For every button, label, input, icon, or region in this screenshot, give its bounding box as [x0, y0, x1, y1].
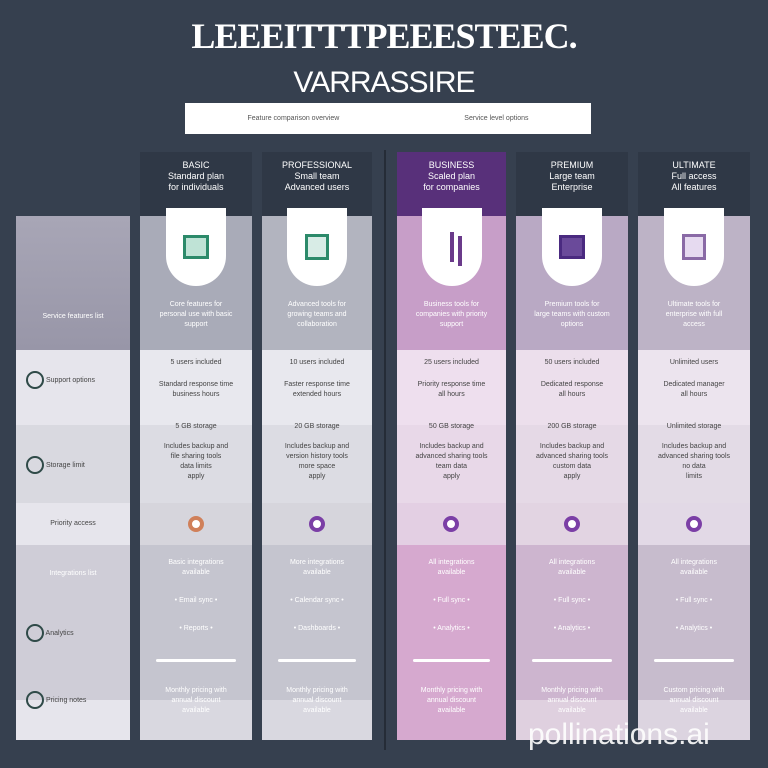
- column 4: Premium tools for: [545, 301, 599, 308]
- column 1: Monthly pricing with: [165, 687, 227, 694]
- column 3: Business tools for: [424, 301, 479, 308]
- column 4: Includes backup and: [540, 443, 604, 450]
- column 4: All integrations: [549, 559, 595, 566]
- icon row 2: Storage limit: [46, 462, 85, 469]
- icon row 1: Support options: [46, 377, 95, 384]
- column headers: Standard plan: [168, 171, 224, 181]
- icon row 3: Analytics: [46, 630, 74, 637]
- column 3: Priority response time: [418, 381, 485, 388]
- column 2: growing teams and: [287, 311, 347, 318]
- column 5: annual discount: [669, 697, 719, 704]
- column 5: • Full sync •: [676, 597, 712, 604]
- subtitle bar: [185, 103, 591, 134]
- icon row 1: [26, 371, 95, 389]
- text: BUSINESS: [429, 160, 474, 170]
- label: features: Service features list: [42, 313, 104, 320]
- column 2: annual discount: [292, 697, 342, 704]
- column 3: all hours: [438, 391, 465, 398]
- text: Advanced users: [285, 182, 349, 192]
- column 2: [262, 216, 372, 740]
- column 3: • Full sync •: [433, 597, 470, 604]
- text: PROFESSIONAL: [282, 160, 352, 170]
- icon row 3: [26, 624, 74, 642]
- column 5: enterprise with full: [666, 311, 722, 318]
- column 1: file sharing tools: [171, 453, 221, 460]
- column 5: available: [680, 707, 708, 714]
- column 5: Unlimited users: [670, 359, 718, 366]
- column 2: Advanced tools for: [288, 301, 346, 308]
- column 5: available: [680, 569, 708, 576]
- text: Enterprise: [551, 182, 593, 192]
- column 5: All integrations: [671, 559, 717, 566]
- column 2: Monthly pricing with: [286, 687, 348, 694]
- watermark: pollinations.ai: [528, 718, 710, 751]
- column 3: team data: [436, 463, 467, 470]
- column 3: annual discount: [427, 697, 476, 704]
- column 5: Unlimited storage: [667, 423, 721, 430]
- text: Small team: [294, 171, 340, 181]
- column 4: [516, 216, 628, 740]
- icon: [166, 208, 226, 286]
- column 2: available: [303, 707, 331, 714]
- column 1: Core features for: [170, 301, 222, 308]
- subtitle bar: Feature comparison overview: [247, 115, 339, 122]
- column 2: Faster response time: [284, 381, 350, 388]
- text: for companies: [423, 182, 480, 192]
- column 1: 5 users included: [170, 359, 221, 366]
- column 4: • Analytics •: [554, 625, 590, 632]
- column 1: [140, 216, 252, 740]
- column 1: Standard response time: [159, 381, 233, 388]
- column 4: apply: [564, 473, 580, 480]
- column 5: Dedicated manager: [663, 381, 725, 388]
- title: [191, 16, 577, 99]
- column 5: limits: [686, 473, 702, 480]
- column 1: apply: [188, 473, 204, 480]
- column 3: available: [438, 569, 465, 576]
- column 3: available: [438, 707, 465, 714]
- column 5: no data: [682, 463, 706, 470]
- text: ULTIMATE: [672, 160, 716, 170]
- column 3: 50 GB storage: [429, 423, 474, 430]
- column 2: version history tools: [286, 453, 348, 460]
- column 4: 50 users included: [545, 359, 599, 366]
- column headers: BASIC: [182, 160, 210, 170]
- column 5: [638, 216, 750, 740]
- divider: [384, 150, 386, 750]
- column 5: Custom pricing with: [663, 687, 725, 694]
- column 2: extended hours: [293, 391, 341, 398]
- column 3: • Analytics •: [433, 625, 470, 632]
- column 1: available: [182, 569, 210, 576]
- icon row 2: [26, 456, 85, 474]
- column 1: • Reports •: [179, 625, 213, 632]
- column 5: access: [683, 321, 705, 328]
- title: VARRASSIRE: [293, 66, 475, 99]
- icon row 4: Pricing notes: [46, 697, 86, 704]
- column 2: 20 GB storage: [294, 423, 340, 430]
- column 5: advanced sharing tools: [658, 453, 730, 460]
- column headers: for individuals: [168, 182, 224, 192]
- column 3: [397, 216, 506, 740]
- text: Scaled plan: [428, 171, 475, 181]
- column 4: available: [558, 569, 586, 576]
- column 3: Monthly pricing with: [421, 687, 482, 694]
- column 1: support: [184, 321, 208, 328]
- column 4: • Full sync •: [554, 597, 590, 604]
- column 1: Includes backup and: [164, 443, 228, 450]
- label column: Priority access: [50, 520, 96, 527]
- title: LEEEITTTPEEESTEEC.: [191, 16, 577, 56]
- text: Full access: [671, 171, 716, 181]
- column 2: available: [303, 569, 331, 576]
- column 4: large teams with custom: [534, 311, 610, 318]
- text: All features: [671, 182, 717, 192]
- column 4: options: [561, 321, 583, 328]
- column 1: data limits: [180, 463, 212, 470]
- column 4: Monthly pricing with: [541, 687, 603, 694]
- label column: [16, 216, 130, 740]
- icon row 4: [26, 691, 86, 709]
- column 3: All integrations: [429, 559, 474, 566]
- column 2: collaboration: [297, 321, 337, 328]
- column 2: more space: [299, 463, 335, 470]
- text: Large team: [549, 171, 595, 181]
- column 4: 200 GB storage: [547, 423, 597, 430]
- column 4: all hours: [559, 391, 585, 398]
- column 4: Dedicated response: [541, 381, 603, 388]
- column 3: apply: [443, 473, 460, 480]
- column 3: Includes backup and: [419, 443, 484, 450]
- column 2: • Dashboards •: [294, 625, 340, 632]
- subtitle bar: Service level options: [464, 115, 528, 122]
- column 5: Ultimate tools for: [668, 301, 720, 308]
- label column: Integrations list: [49, 570, 97, 577]
- column 1: Basic integrations: [168, 559, 224, 566]
- column 2: Includes backup and: [285, 443, 349, 450]
- column 2: 10 users included: [290, 359, 344, 366]
- column 5: all hours: [681, 391, 707, 398]
- column 3: support: [440, 321, 463, 328]
- column 4: available: [558, 707, 586, 714]
- column 5: • Analytics •: [676, 625, 712, 632]
- column 1: annual discount: [171, 697, 221, 704]
- column 4: custom data: [553, 463, 591, 470]
- column 1: 5 GB storage: [175, 423, 217, 430]
- column 4: annual discount: [547, 697, 597, 704]
- column 1: business hours: [172, 391, 220, 398]
- column 1: available: [182, 707, 210, 714]
- column headers: [140, 152, 252, 216]
- column 3: 25 users included: [424, 359, 479, 366]
- column 1: • Email sync •: [175, 597, 217, 604]
- column 3: advanced sharing tools: [416, 453, 488, 460]
- column 2: apply: [309, 473, 325, 480]
- column 2: • Calendar sync •: [290, 597, 344, 604]
- text: PREMIUM: [551, 160, 593, 170]
- column 5: Includes backup and: [662, 443, 726, 450]
- column 1: personal use with basic: [160, 311, 232, 318]
- column 2: More integrations: [290, 559, 344, 566]
- column 4: advanced sharing tools: [536, 453, 608, 460]
- column 3: companies with priority: [416, 311, 487, 318]
